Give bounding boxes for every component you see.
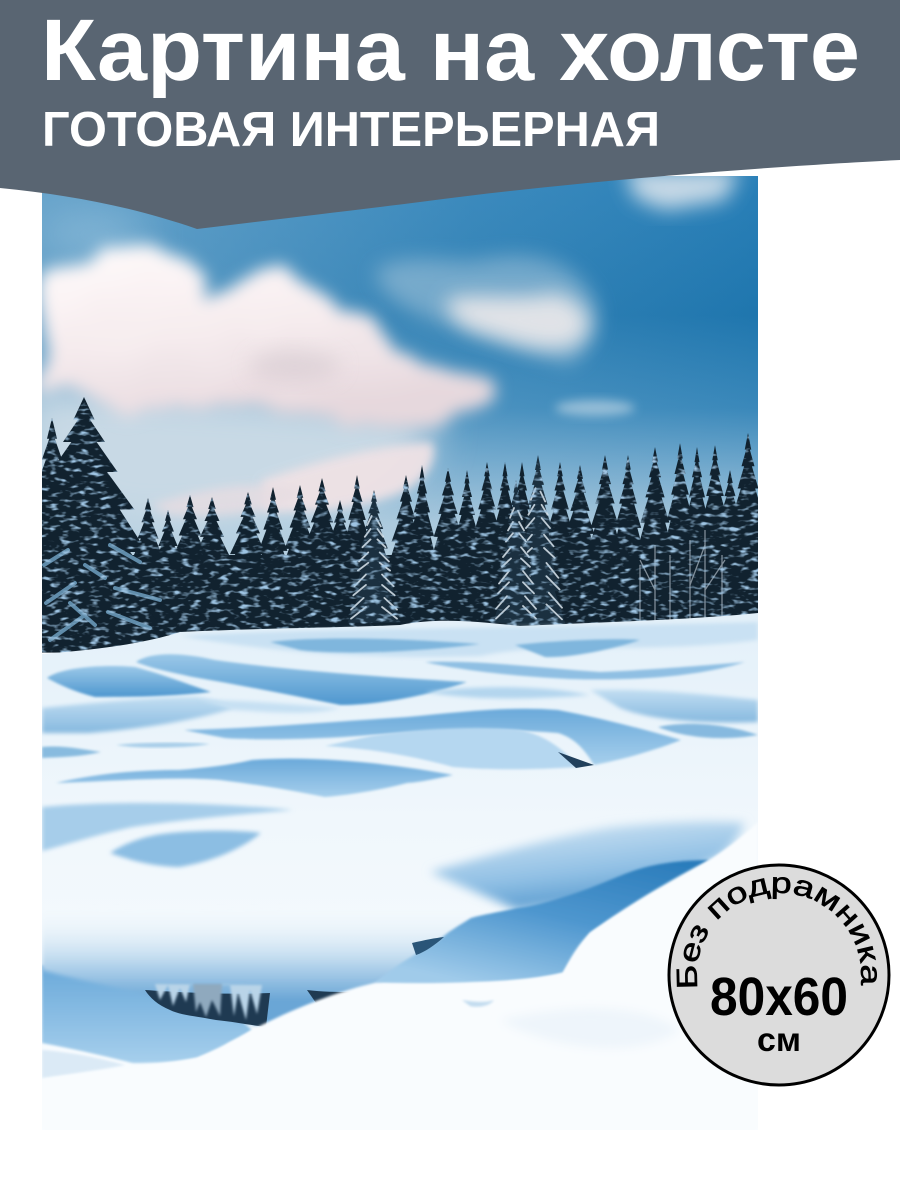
left mound: [42, 697, 234, 733]
forest: [0, 397, 778, 653]
middle band: [184, 709, 681, 765]
subtitle: ГОТОВАЯ ИНТЕРЬЕРНАЯ: [42, 103, 660, 157]
ice crevice: [145, 937, 444, 1027]
photo: winter landscape: [42, 176, 758, 1080]
size badge: [668, 864, 890, 1086]
lower left patches: [42, 803, 293, 851]
lower mound: [170, 826, 756, 1062]
big spruce snow branches: [44, 545, 160, 640]
title: Картина на холсте: [41, 2, 860, 99]
sky: [42, 176, 758, 555]
back drifts: [180, 622, 758, 657]
snow field: [42, 613, 758, 1130]
badge size: 80x60: [710, 967, 848, 1027]
bottom-left shadow: [42, 965, 252, 1063]
lower band: [56, 759, 453, 797]
badge curved label: Без подрамника: [676, 877, 878, 987]
deep shadow right: [375, 860, 709, 984]
trench: [136, 654, 467, 705]
drift overhang face: [42, 927, 452, 1028]
shadow above drift lip: [430, 822, 745, 910]
clouds: [20, 170, 740, 530]
right drifts: [590, 690, 758, 722]
header banner: [0, 0, 900, 229]
badge unit: см: [757, 1021, 801, 1058]
left basin: [47, 666, 211, 697]
bare birches: [640, 530, 725, 625]
